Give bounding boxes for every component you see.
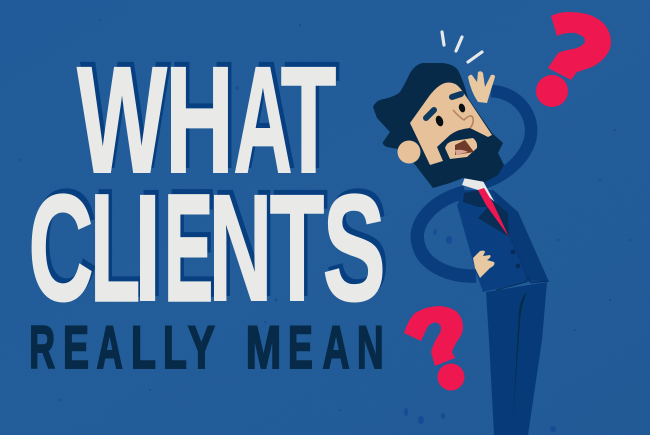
heading shadow: WHAT xyxy=(81,30,340,200)
trousers xyxy=(486,282,547,435)
heading: WHAT xyxy=(77,35,336,205)
face xyxy=(410,83,492,165)
heading: WHAT: W xyxy=(77,35,167,204)
heading shadow: CLIENTS: S xyxy=(326,158,389,327)
jacket hem xyxy=(496,277,548,290)
heading shadow: WHAT: H xyxy=(169,30,237,199)
tie xyxy=(478,188,509,237)
jacket xyxy=(457,190,549,292)
heading: CLIENTS: I xyxy=(134,163,161,332)
heading: CLIENTS: L xyxy=(91,163,140,332)
subheading: REALLY MEAN: L xyxy=(131,313,156,381)
subheading: REALLY MEAN: Y xyxy=(188,314,215,381)
heading: WHAT: T xyxy=(281,36,336,205)
nose xyxy=(453,110,473,128)
heading shadow: CLIENTS xyxy=(32,158,389,328)
heading shadow: CLIENTS: E xyxy=(168,159,216,328)
ear xyxy=(398,140,420,164)
heading: CLIENTS xyxy=(28,163,386,333)
icon: red question mark bottom xyxy=(404,306,464,390)
subheading: REALLY MEAN: L xyxy=(163,313,187,381)
subheading: REALLY MEAN: N xyxy=(357,314,384,381)
heading shadow: CLIENTS: L xyxy=(94,158,143,327)
subheading: REALLY MEAN: A xyxy=(97,315,123,381)
sleeve xyxy=(493,190,549,282)
icon: surprise tick marks xyxy=(442,32,482,62)
subheading: REALLY MEAN: A xyxy=(323,314,349,381)
subheading: REALLY MEAN xyxy=(29,313,384,382)
heading: CLIENTS: C xyxy=(28,164,93,333)
heading shadow: CLIENTS: N xyxy=(212,159,276,328)
lapels xyxy=(463,190,487,207)
hand on hip xyxy=(473,251,494,278)
eyebrows xyxy=(426,94,461,118)
neck xyxy=(464,175,480,183)
character: confused businessman xyxy=(373,63,549,435)
heading: CLIENTS: N xyxy=(209,164,272,333)
mouth area xyxy=(445,138,477,159)
raised arm xyxy=(483,91,531,183)
heading: WHAT: A xyxy=(234,35,292,204)
heading: CLIENTS: E xyxy=(164,164,213,333)
jacket front edge xyxy=(510,238,526,278)
heading shadow: WHAT: A xyxy=(237,30,296,199)
trouser crease xyxy=(513,292,527,420)
arm on hip xyxy=(417,192,476,276)
heading shadow: CLIENTS: I xyxy=(138,158,164,327)
heading shadow: CLIENTS: T xyxy=(273,160,328,328)
hair and beard xyxy=(373,63,504,188)
subheading: REALLY MEAN: R xyxy=(29,315,55,381)
heading: WHAT: H xyxy=(165,35,234,204)
buttons xyxy=(511,250,520,268)
tongue xyxy=(455,150,468,155)
shirt collar xyxy=(462,177,500,212)
raised hand xyxy=(468,71,495,103)
heading shadow: WHAT: T xyxy=(284,31,340,200)
subheading: REALLY MEAN: E xyxy=(63,313,89,381)
subheading: REALLY MEAN: M xyxy=(246,315,281,382)
title: WHAT CLIENTS REALLY MEAN xyxy=(28,30,389,382)
heading: CLIENTS: S xyxy=(323,163,386,332)
eyes xyxy=(434,103,466,127)
heading shadow: CLIENTS: C xyxy=(32,159,97,328)
open mouth xyxy=(455,140,474,155)
heading: CLIENTS: T xyxy=(270,165,324,333)
icon: red question mark top xyxy=(536,12,611,107)
heading shadow: WHAT: W xyxy=(81,30,171,199)
subheading: REALLY MEAN: E xyxy=(288,314,313,381)
